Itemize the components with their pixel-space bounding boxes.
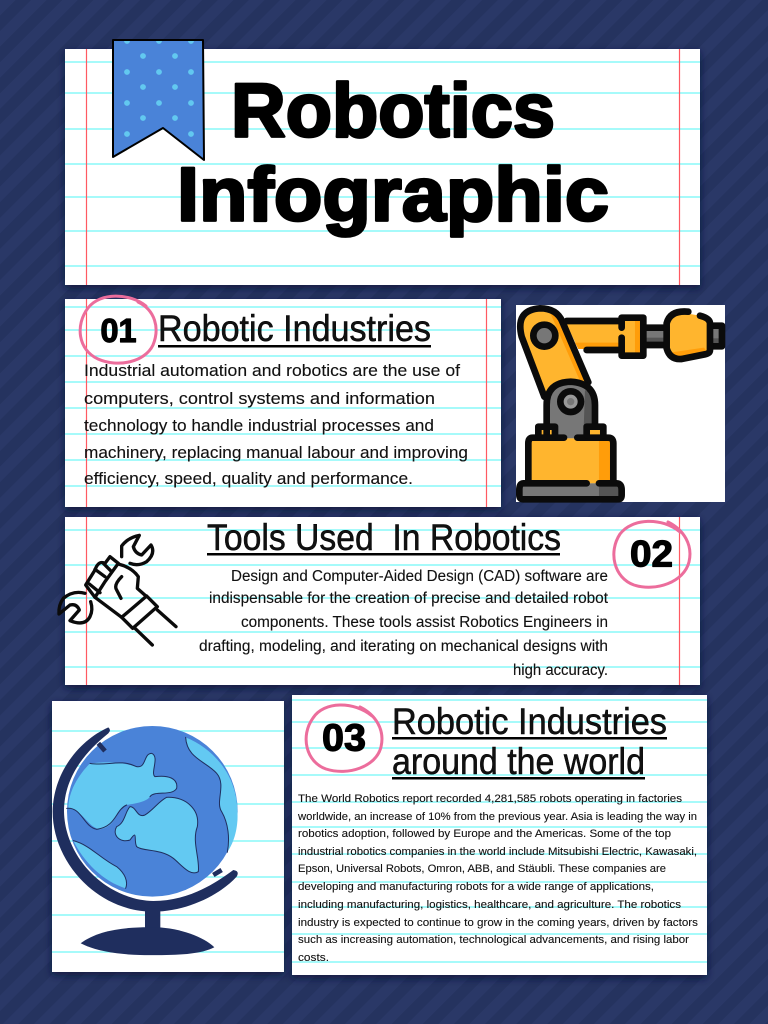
heading: Tools Used In Robotics <box>207 517 561 558</box>
heading: Robotic Industries <box>158 308 431 349</box>
body text: Epson, Universal Robots, Omron, ABB, and Stäubli. These companies are <box>298 863 666 875</box>
body text: indispensable for the creation of precise and detailed robot <box>209 590 609 607</box>
body text: industrial robotics companies in the world include Mitsubishi Electric, Kawasaki, <box>298 846 697 858</box>
heading: Robotic Industries <box>392 701 667 742</box>
heading <box>392 701 667 782</box>
body text <box>84 361 468 488</box>
body text: technology to handle industrial processes and <box>84 416 434 435</box>
body text: high accuracy. <box>513 662 608 679</box>
number badge 01 <box>80 296 156 363</box>
icon: globe <box>53 726 238 955</box>
body text: The World Robotics report recorded 4,281,585 robots operating in factories <box>298 793 682 805</box>
panel: robot arm <box>516 305 725 502</box>
body text <box>199 568 609 679</box>
title <box>177 68 609 238</box>
body text: worldwide, an increase of 10% from the previous year. Asia is leading the way in <box>297 811 697 823</box>
body text: Industrial automation and robotics are the use of <box>84 361 460 380</box>
body text: machinery, replacing manual labour and improving <box>84 443 468 462</box>
icon: robot arm <box>519 308 722 499</box>
number badge 02: 02 <box>630 534 673 574</box>
body text <box>297 793 698 964</box>
icon: hand holding wrench <box>59 535 176 645</box>
body text: developing and manufacturing robots for a wide range of applications, <box>298 881 654 893</box>
number badge 02 <box>614 521 690 587</box>
panel: tools used in robotics <box>59 517 700 685</box>
body text: components. These tools assist Robotics Engineers in <box>241 614 608 631</box>
number badge 01: 01 <box>100 312 136 349</box>
body text: industry is expected to continue to grow in the coming years, driven by factors <box>298 917 698 929</box>
panel: robotic industries <box>65 296 501 507</box>
body text: efficiency, speed, quality and performance. <box>84 469 413 488</box>
body text: such as increasing automation, technological advancements, and rising labor <box>298 934 689 946</box>
body text: costs. <box>298 952 329 964</box>
icon: bookmark ribbon <box>113 40 204 160</box>
panel: globe <box>52 701 284 972</box>
body text: Design and Computer-Aided Design (CAD) software are <box>231 568 608 585</box>
panel: title <box>65 40 700 285</box>
body text: including manufacturing, logistics, healthcare, and agriculture. The robotics <box>298 899 681 911</box>
title: Robotics <box>231 68 555 154</box>
body text: computers, control systems and information <box>84 389 435 408</box>
number badge 03 <box>306 705 382 771</box>
body text: drafting, modeling, and iterating on mechanical designs with <box>199 638 608 655</box>
title: Infographic <box>177 152 609 238</box>
heading: around the world <box>392 741 645 782</box>
number badge 03: 03 <box>322 718 366 760</box>
panel: robotic industries around the world <box>292 695 707 975</box>
body text: robotics adoption, followed by Europe and the Americas. Some of the top <box>298 828 671 840</box>
